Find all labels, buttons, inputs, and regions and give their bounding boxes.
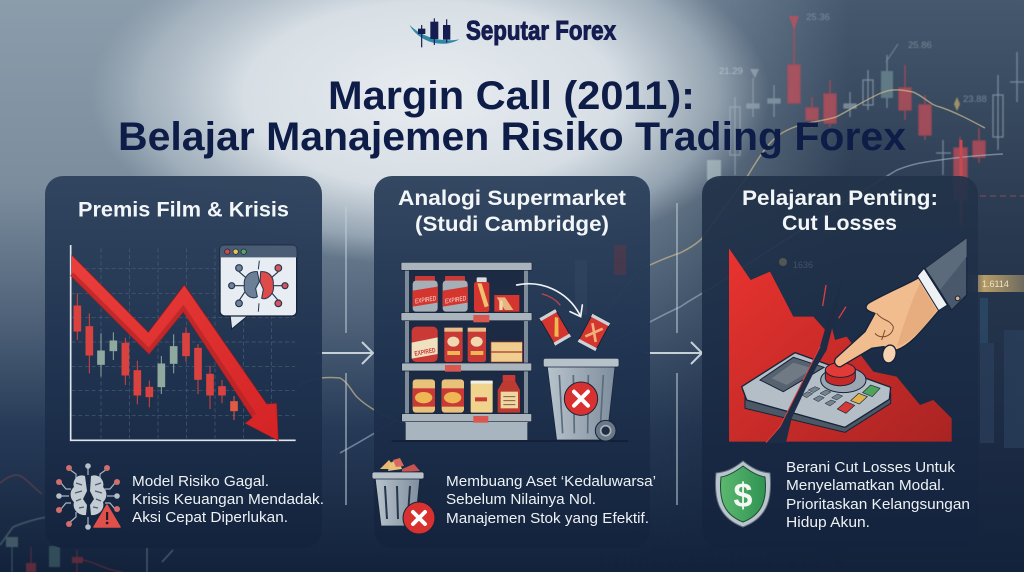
title: Belajar Manajemen Risiko Trading Forex bbox=[118, 115, 906, 159]
alarm device bbox=[742, 353, 891, 432]
shelf bbox=[392, 262, 628, 441]
heading: analogi: (Studi Cambridge) bbox=[415, 213, 609, 236]
light glow behind title bbox=[0, 0, 1024, 300]
red button bbox=[821, 363, 866, 393]
icon: brain with warning bbox=[56, 463, 120, 530]
gold price tag: 1.6114 bbox=[982, 279, 1009, 289]
background candlestick chart top right bbox=[707, 12, 1024, 200]
text: premis summary: Aksi Cepat Diperlukan. bbox=[132, 509, 288, 526]
text: cut losses summary: Hidup Akun. bbox=[786, 514, 870, 531]
heading: pelajaran: Pelajaran Penting: bbox=[742, 187, 938, 210]
pointing hand bbox=[835, 277, 942, 367]
connector arrow 2 bbox=[645, 342, 702, 364]
row 2 products bbox=[412, 327, 522, 362]
line chart with falling arrow bbox=[71, 245, 297, 441]
red dashed level bbox=[980, 195, 1024, 197]
logo wordmark: Seputar Forex bbox=[466, 16, 616, 46]
icon: browser with split brain bbox=[220, 245, 297, 329]
icon: small trash with x bbox=[372, 458, 435, 534]
panel: cut losses bbox=[702, 140, 978, 548]
faint figure behind illustration: 1636 bbox=[793, 260, 813, 270]
row 1 products bbox=[413, 276, 519, 312]
row 3 products bbox=[413, 375, 520, 413]
faint chart through panel bbox=[575, 245, 626, 315]
heading: pelajaran bbox=[742, 187, 938, 235]
crack through chart and device bbox=[766, 277, 846, 443]
text: cut losses summary: Berani Cut Losses Untuk bbox=[786, 459, 956, 476]
text: premis summary bbox=[132, 473, 324, 526]
candle behind panel bbox=[960, 140, 962, 225]
bottom left chart remnants bbox=[0, 475, 173, 572]
curved arrow into bin bbox=[517, 284, 582, 317]
illustration: hand pressing stop button bbox=[729, 238, 967, 443]
supermarket shelf and bin illustration bbox=[392, 262, 628, 441]
shirt cuff and sleeve bbox=[917, 238, 967, 311]
chart price labels: 25.86 bbox=[908, 40, 932, 51]
heading: pelajaran: Cut Losses bbox=[782, 212, 897, 235]
chart price labels bbox=[719, 12, 987, 105]
text: premis summary: Krisis Keuangan Mendadak. bbox=[132, 491, 324, 508]
blue trend line bbox=[340, 154, 1003, 453]
falling cans bbox=[539, 309, 610, 351]
logo bbox=[409, 16, 616, 47]
text: cut losses summary bbox=[786, 459, 970, 531]
axes bbox=[71, 245, 296, 440]
arrow lower edge shading bbox=[72, 274, 254, 415]
heading: analogi bbox=[398, 187, 626, 236]
logo mark bbox=[409, 18, 459, 47]
title bbox=[118, 74, 906, 159]
panel: analogi supermarket bbox=[372, 176, 656, 548]
text: cut losses summary: Menyelamatkan Modal. bbox=[786, 477, 945, 494]
panel: premis film bbox=[45, 176, 324, 548]
gold price tag bbox=[967, 275, 1024, 292]
vertical light bars between panels bbox=[346, 203, 677, 505]
chart price labels: 25.36 bbox=[806, 12, 830, 23]
candles bbox=[74, 293, 237, 420]
text: analogi summary bbox=[446, 473, 656, 527]
red falling chart area bbox=[729, 248, 952, 442]
lower right bars bbox=[980, 298, 1024, 448]
icon: green shield with dollar: $ bbox=[734, 477, 753, 515]
title: Margin Call (2011): bbox=[328, 74, 695, 118]
chart price labels: 23.88 bbox=[963, 94, 987, 105]
text: analogi summary: Manajemen Stok yang Efektif. bbox=[446, 510, 649, 527]
heading: premis: Premis Film & Krisis bbox=[78, 198, 289, 222]
chart price labels: 21.29 bbox=[719, 66, 743, 77]
faint figure behind illustration bbox=[779, 258, 813, 270]
text: analogi summary: Sebelum Nilainya Nol. bbox=[446, 491, 596, 508]
text: analogi summary: Membuang Aset ‘Kedaluwarsa’ bbox=[446, 473, 656, 490]
text: premis summary: Model Risiko Gagal. bbox=[132, 473, 269, 490]
text: cut losses summary: Prioritaskan Kelangsungan bbox=[786, 496, 970, 513]
connector arrow 1 bbox=[316, 342, 373, 364]
row 1 products: EXPIRED bbox=[445, 295, 467, 306]
falling red arrow bbox=[72, 255, 278, 441]
heading: analogi: Analogi Supermarket bbox=[398, 187, 626, 210]
gold trend line bbox=[297, 90, 985, 423]
icon: green shield with dollar bbox=[715, 461, 771, 527]
trash bin bbox=[543, 358, 619, 441]
row 1 products: EXPIRED bbox=[415, 295, 437, 306]
row 2 products: EXPIRED bbox=[414, 347, 436, 358]
